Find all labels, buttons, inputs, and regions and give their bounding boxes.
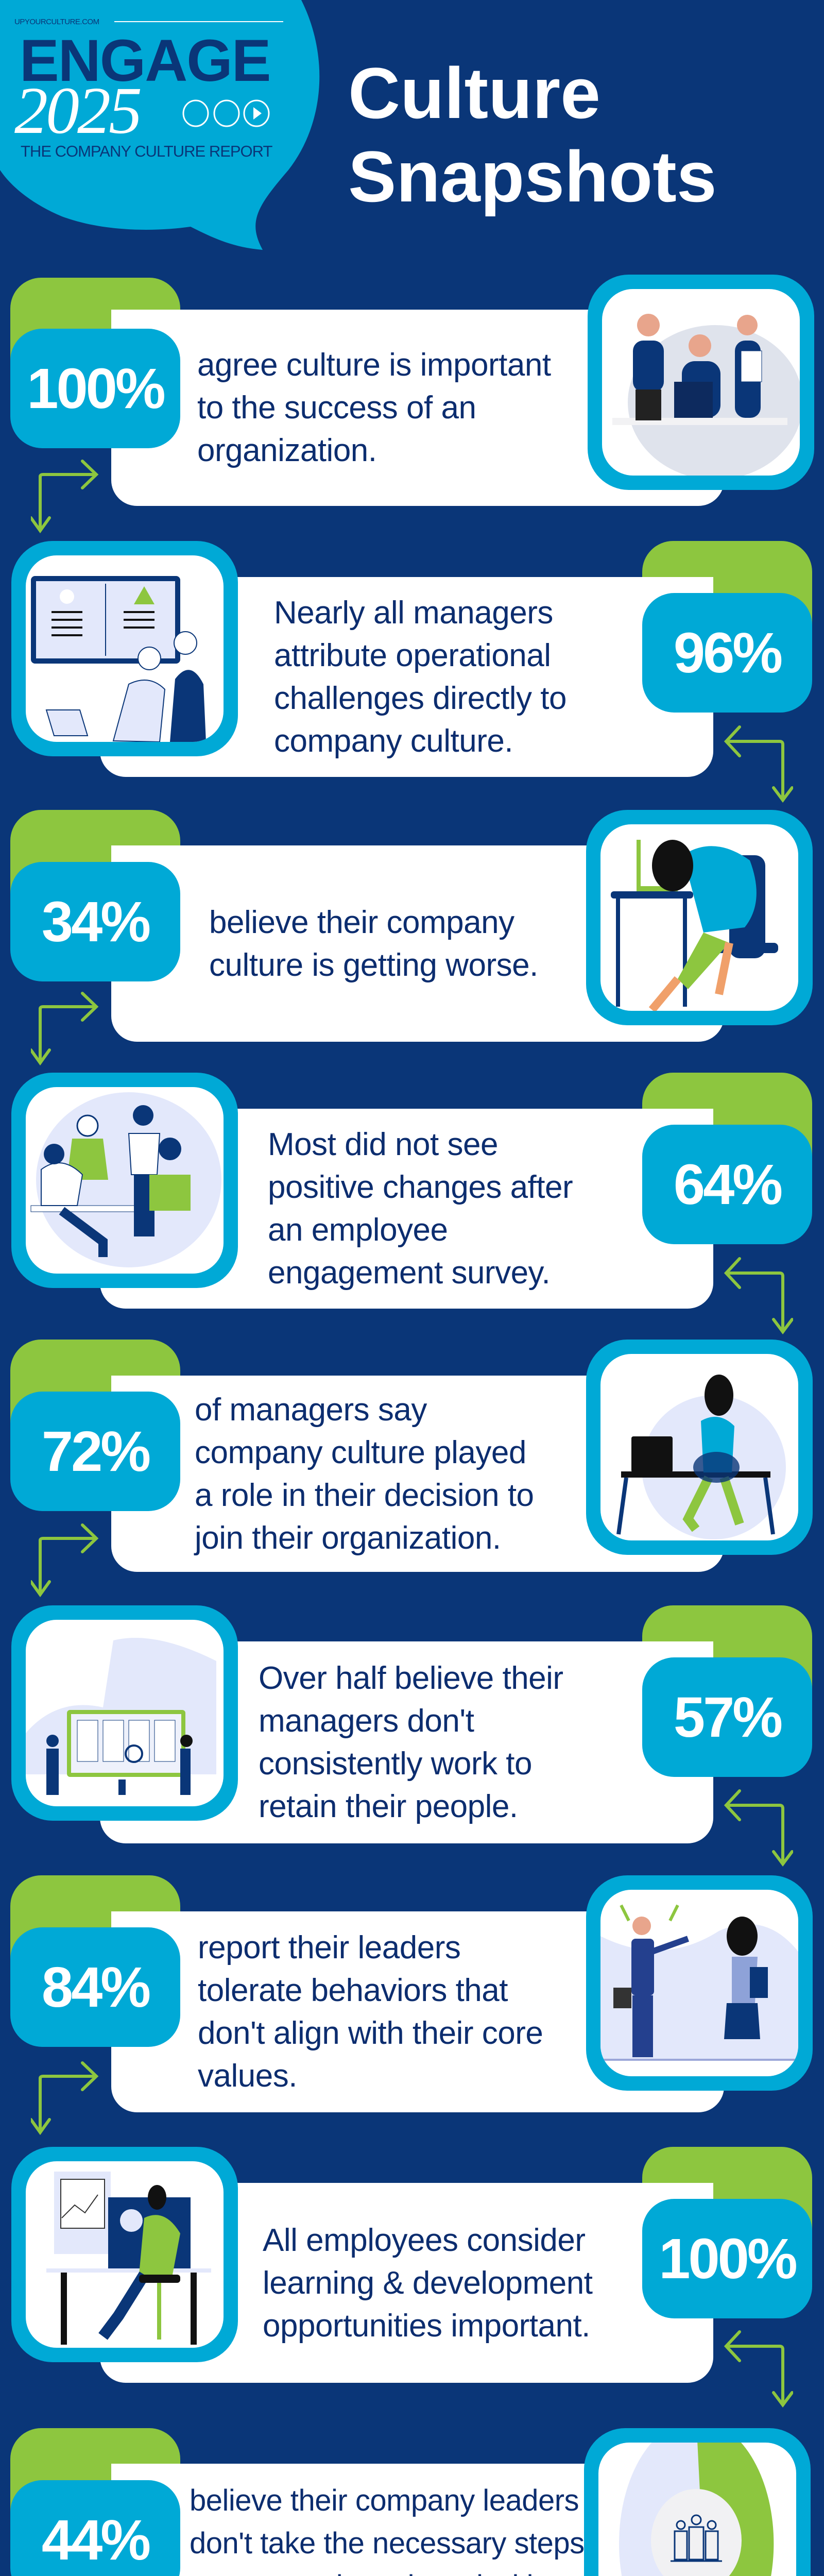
stat 84%: 84% (42, 1956, 149, 2019)
illustration: exhausted worker (586, 810, 813, 1025)
illustration: hiring board (11, 1605, 238, 1821)
card text: Nearly all managers (274, 595, 553, 631)
illustration: team at laptop (588, 275, 814, 490)
card text: opportunities important. (263, 2308, 590, 2343)
card text: tolerate behaviors that (198, 1973, 508, 2008)
card text: culture is getting worse. (209, 947, 538, 983)
arrow 8 (724, 2330, 793, 2408)
stat 57%: 57% (674, 1686, 781, 1749)
arrow 3 (31, 992, 99, 1065)
card text: report their leaders (198, 1930, 460, 1965)
card text: learning & development (263, 2265, 592, 2301)
card text: a role in their decision to (195, 1478, 534, 1513)
card text (111, 1911, 724, 2112)
card text: don't take the necessary steps (190, 2527, 585, 2560)
card text (111, 2464, 724, 2576)
arrow 7 (31, 2061, 99, 2135)
stat 96% (642, 593, 812, 713)
title (348, 53, 717, 217)
card text: Over half believe their (259, 1660, 563, 1696)
card text: organization. (197, 433, 377, 468)
section 5 (10, 1340, 813, 1572)
illustration: presentation (11, 541, 238, 756)
section 2 (11, 541, 812, 777)
stat 72%: 72% (42, 1420, 149, 1483)
card text (100, 2183, 713, 2383)
stat 96%: 96% (674, 621, 781, 684)
title: Snapshots (348, 136, 717, 217)
card text: challenges directly to (274, 681, 566, 716)
logo: 2025: 2025 (14, 74, 140, 148)
card text: engagement survey. (268, 1255, 550, 1291)
stat 84% (10, 1927, 180, 2047)
illustration: woman at laptop (586, 1340, 813, 1555)
card text: values. (198, 2058, 297, 2094)
card text: All employees consider (263, 2223, 586, 2258)
logo: ENGAGE: ENGAGE (20, 28, 270, 94)
card text: company culture played (195, 1434, 526, 1470)
arrow 2 (724, 725, 793, 803)
card text: believe their company leaders (190, 2484, 579, 2517)
card text (100, 1109, 713, 1309)
card text (100, 1641, 713, 1843)
section 9 (10, 2428, 811, 2576)
stat 34%: 34% (42, 890, 149, 953)
arrow 1 (31, 460, 99, 533)
title: Culture (348, 53, 600, 133)
site url: UPYOURCULTURE.COM (14, 18, 99, 26)
card text: don't align with their core (198, 2015, 543, 2051)
section 6 (11, 1605, 812, 1843)
card text: company culture. (274, 723, 513, 759)
stat 34% (10, 862, 180, 981)
card text (111, 310, 724, 506)
card text (111, 1376, 724, 1572)
arrow 6 (724, 1789, 793, 1867)
illustration: team meeting (11, 1073, 238, 1288)
section 8 (11, 2147, 812, 2383)
stat 100%: 100% (27, 357, 164, 420)
stat 100% (642, 2199, 812, 2318)
card text: of managers say (195, 1392, 427, 1427)
card text: to the success of an (197, 390, 476, 426)
stat 44% (10, 2480, 180, 2576)
section 3 (10, 810, 813, 1042)
card text: managers don't (259, 1703, 474, 1739)
icon: circles (182, 100, 270, 127)
stat 44%: 44% (42, 2508, 149, 2572)
card text: join their organization. (195, 1520, 501, 1556)
card text: Most did not see (268, 1127, 498, 1162)
stat 57% (642, 1657, 812, 1777)
header speech bubble (0, 0, 319, 250)
card text: an employee (268, 1212, 448, 1248)
section 7 (10, 1875, 813, 2112)
arrow 5 (31, 1523, 99, 1597)
card text: agree culture is important (197, 347, 551, 383)
card text: consistently work to (259, 1746, 532, 1782)
illustration: conflict (586, 1875, 813, 2091)
arrow 4 (724, 1257, 793, 1334)
subtitle: THE COMPANY CULTURE REPORT (21, 142, 272, 160)
stat 64% (642, 1125, 812, 1244)
illustration: donut chart (584, 2428, 811, 2576)
card text: retain their people. (259, 1789, 518, 1824)
card text: believe their company (209, 905, 514, 940)
stat 100% (10, 329, 180, 448)
stat 64%: 64% (674, 1153, 781, 1216)
stat 72% (10, 1392, 180, 1511)
card text: attribute operational (274, 638, 551, 673)
stat 100%: 100% (659, 2227, 796, 2291)
card text: positive changes after (268, 1170, 573, 1205)
card text (100, 577, 713, 777)
card text (111, 845, 724, 1042)
section 4 (11, 1073, 812, 1309)
illustration: woman at desk (11, 2147, 238, 2362)
section 1 (10, 275, 814, 506)
